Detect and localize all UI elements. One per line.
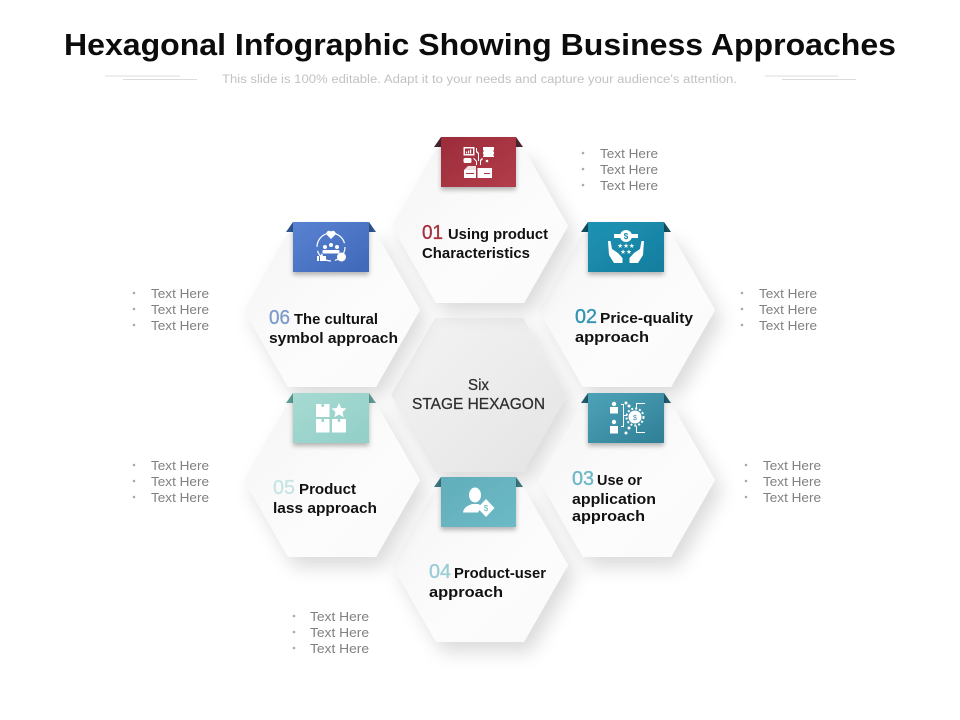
label 04 xyxy=(429,561,546,601)
label 02: Price-quality xyxy=(600,310,694,327)
banner 03 xyxy=(581,393,671,443)
hexagon 02 xyxy=(539,233,715,387)
label 02: approach xyxy=(575,329,649,346)
label 03 xyxy=(572,468,656,525)
label 05: lass approach xyxy=(273,500,377,517)
icon: users and gear: $ xyxy=(633,415,637,422)
label 05: 05 xyxy=(273,477,295,499)
label 05 xyxy=(273,477,377,517)
label 02 xyxy=(575,306,694,346)
banner 06 xyxy=(286,222,376,272)
bullet list 05: Text Here xyxy=(151,475,209,489)
hexagon 01 xyxy=(392,149,568,303)
title: Hexagonal Infographic Showing Business Approaches xyxy=(64,27,896,62)
bullet list 04: Text Here xyxy=(310,610,369,624)
label 06: The cultural xyxy=(294,311,378,328)
bullet list 05: Text Here xyxy=(151,491,209,505)
icon: product characteristics xyxy=(464,147,494,178)
label 04: 04 xyxy=(429,561,451,583)
icon: hands with coin: ★★★ xyxy=(617,242,635,250)
bullet list 06: Text Here xyxy=(151,303,209,317)
icon: boxes and star xyxy=(316,403,346,432)
bullet list 01: Text Here xyxy=(600,179,658,193)
bullet list 02: Text Here xyxy=(759,303,817,317)
subtitle: This slide is 100% editable. Adapt it to your needs and capture your audience's attention. xyxy=(222,74,737,86)
centre label: STAGE HEXAGON xyxy=(412,396,545,413)
label 01 xyxy=(422,222,548,262)
hexagon 04 xyxy=(392,488,568,642)
bullet list 01: Text Here xyxy=(600,163,658,177)
bullet list 04 xyxy=(293,610,369,656)
label 02: 02 xyxy=(575,306,597,328)
bullet list 02: Text Here xyxy=(759,319,817,333)
bullet list 03: Text Here xyxy=(763,491,821,505)
label 03: approach xyxy=(572,508,645,525)
centre label xyxy=(412,377,545,413)
bullet list 06: Text Here xyxy=(151,287,209,301)
bullet list 05: Text Here xyxy=(151,459,209,473)
icon: hands with coin: ★★ xyxy=(620,248,632,256)
banner 02 xyxy=(581,222,671,272)
icon: hands with coin xyxy=(608,230,644,263)
bullet list 03 xyxy=(745,459,821,505)
bullet list 06 xyxy=(133,287,209,333)
centre hexagon xyxy=(391,318,567,472)
bullet list 02: Text Here xyxy=(759,287,817,301)
label 01: Characteristics xyxy=(422,245,530,262)
bullet list 03: Text Here xyxy=(763,459,821,473)
label 06: 06 xyxy=(269,307,290,329)
hexagon 05 xyxy=(244,403,420,557)
bullet list 03: Text Here xyxy=(763,475,821,489)
label 03: 03 xyxy=(572,468,594,490)
label 03: application xyxy=(572,491,656,508)
hexagon 03 xyxy=(539,403,715,557)
banner 05 xyxy=(286,393,376,443)
bullet list 06: Text Here xyxy=(151,319,209,333)
label 01: Using product xyxy=(448,226,548,243)
bullet list 05 xyxy=(133,459,209,505)
label 05: Product xyxy=(299,481,356,498)
label 04: approach xyxy=(429,584,503,601)
icon: user with dollar: $ xyxy=(484,504,489,513)
hexagon 06 xyxy=(244,233,420,387)
centre label: Six xyxy=(468,377,489,394)
bullet list 04: Text Here xyxy=(310,642,369,656)
label 04: Product-user xyxy=(454,565,546,582)
label 06 xyxy=(269,307,398,347)
bullet list 01: Text Here xyxy=(600,147,658,161)
bullet list 01 xyxy=(582,147,658,193)
label 06: symbol approach xyxy=(269,330,398,347)
bullet list 04: Text Here xyxy=(310,626,369,640)
banner 01 xyxy=(434,137,523,187)
bullet list 02 xyxy=(741,287,817,333)
icon: hands with coin: $ xyxy=(624,232,629,241)
banner 04 xyxy=(434,477,523,527)
label 03: Use or xyxy=(597,472,642,489)
icon: community circle xyxy=(317,231,346,262)
label 01: 01 xyxy=(422,222,443,244)
